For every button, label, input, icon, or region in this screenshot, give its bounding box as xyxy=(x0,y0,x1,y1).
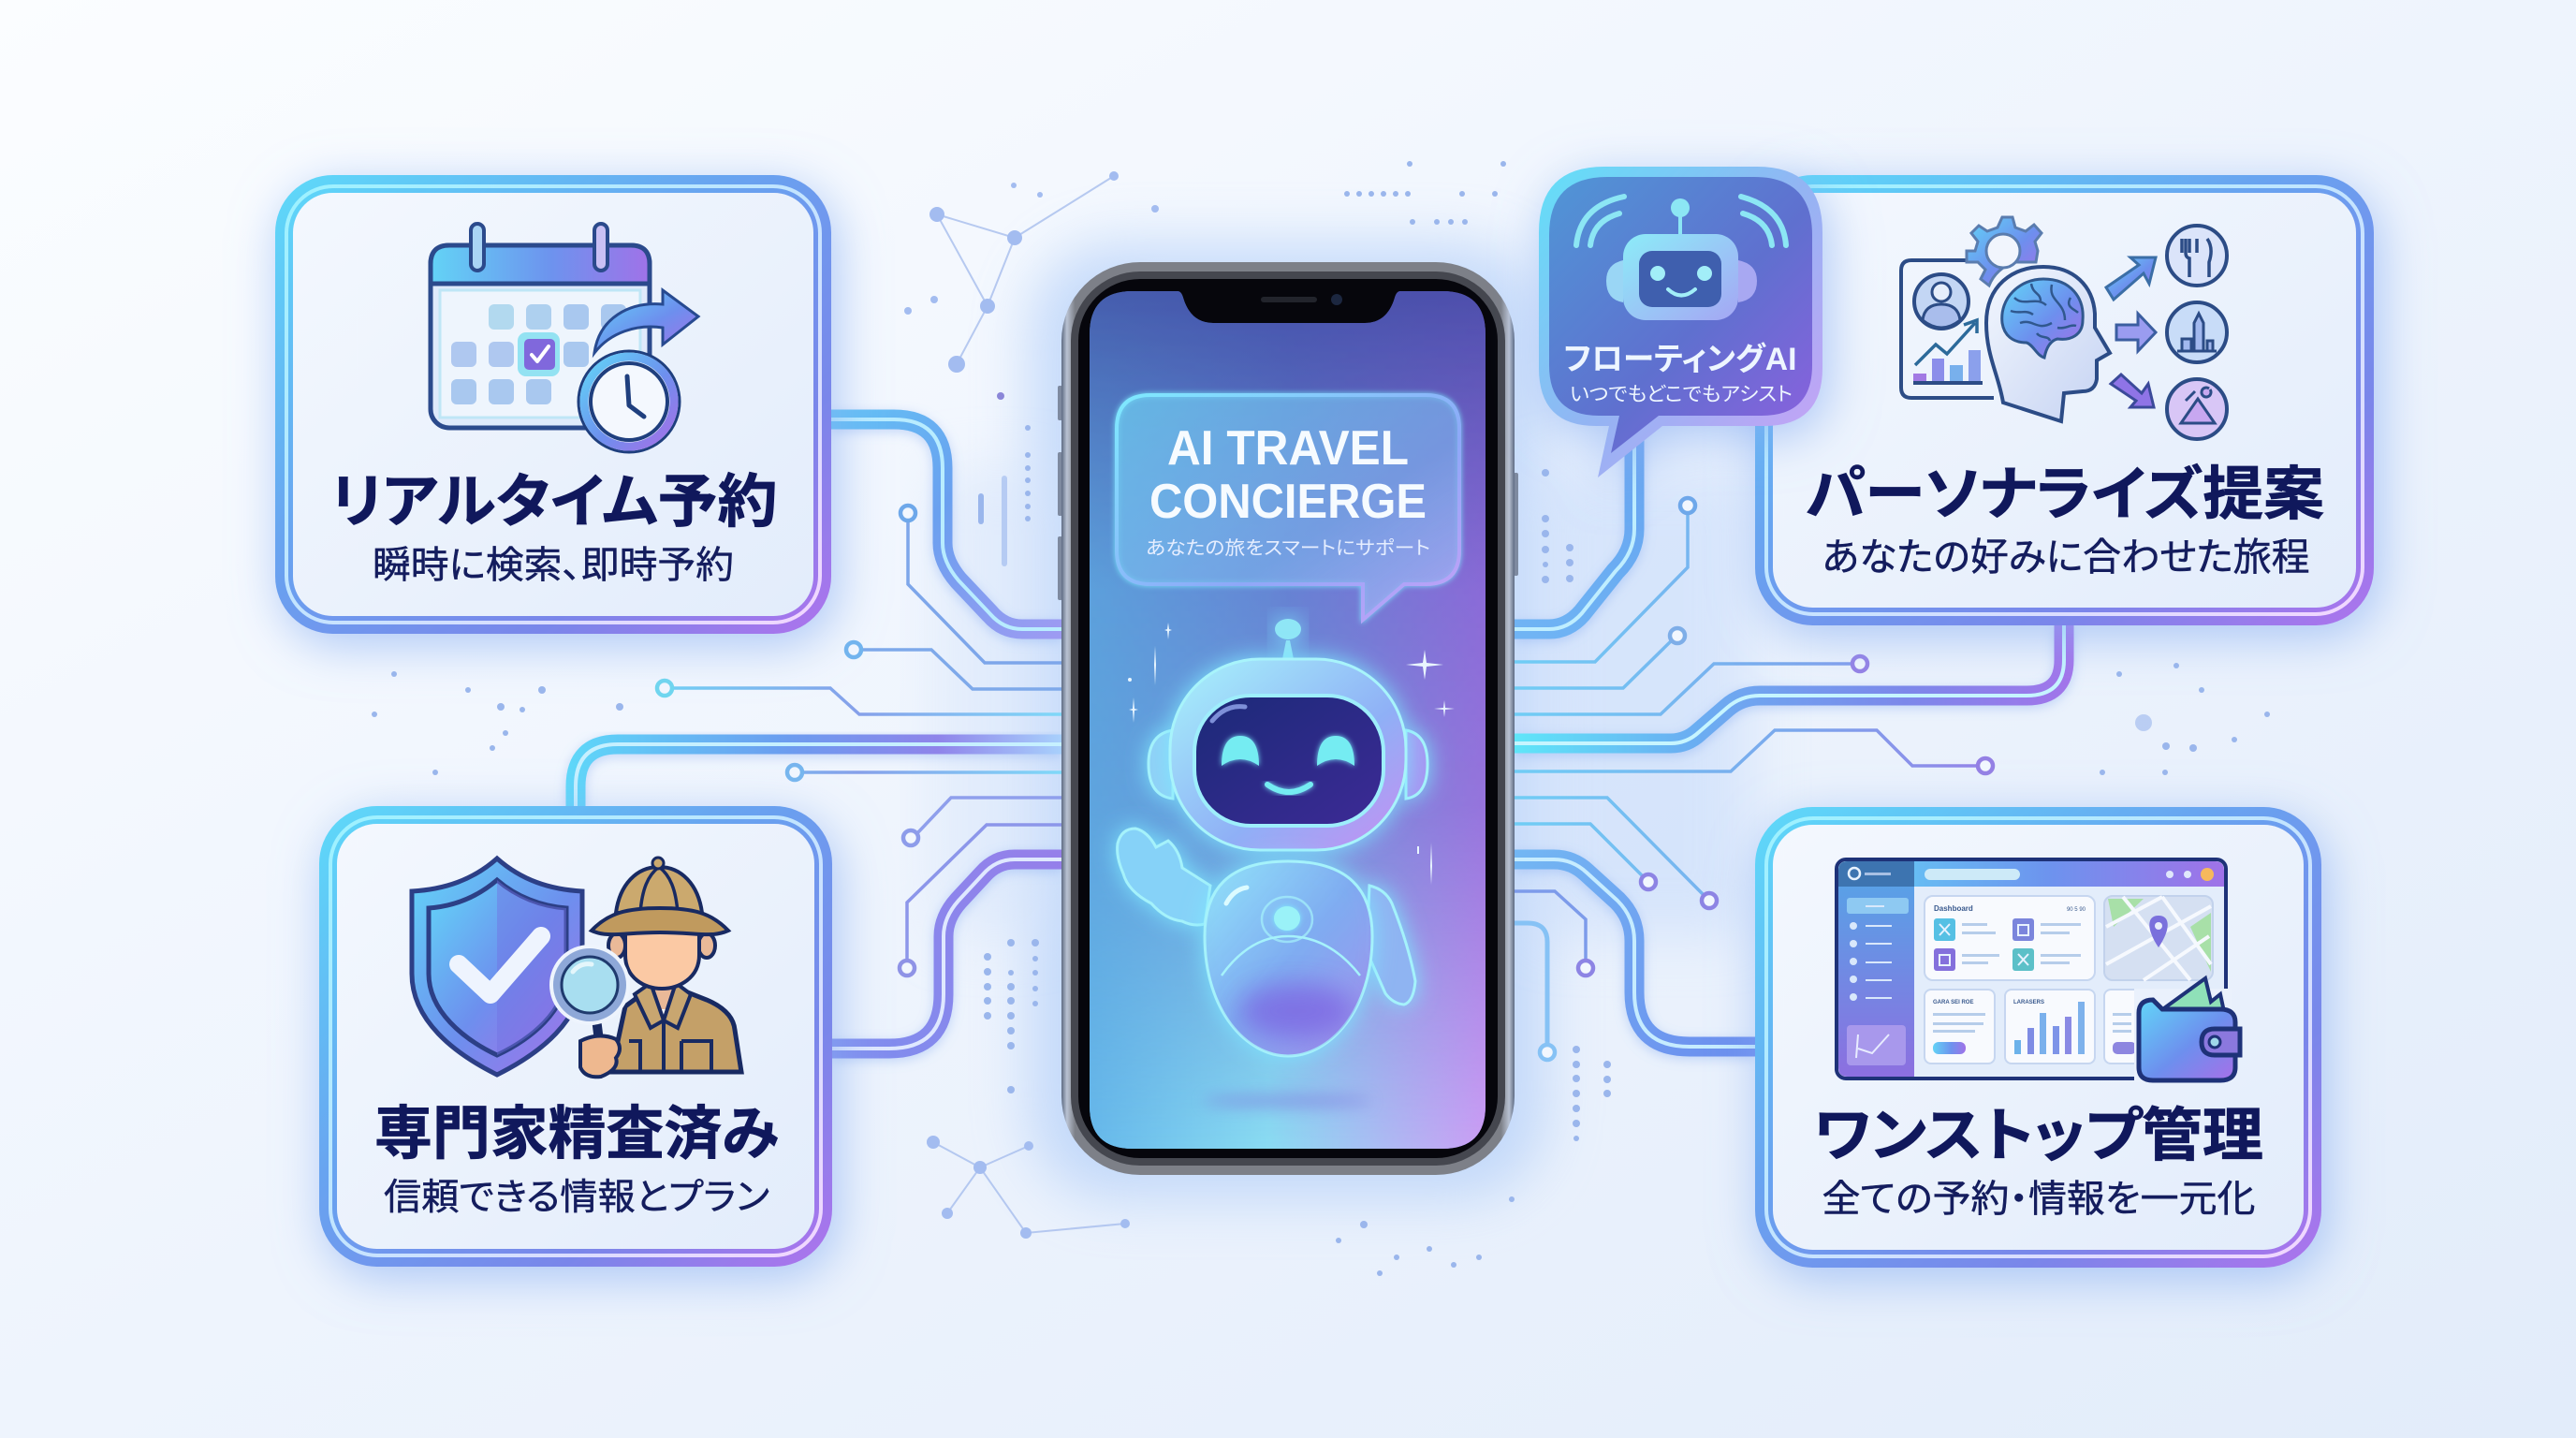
thick connector: expert verified xyxy=(576,744,1061,806)
icon: dashboard and wallet: LARASERS xyxy=(2013,1000,2044,1005)
bubble heading: フローティングAI xyxy=(1563,342,1797,377)
background constellations and dots xyxy=(372,161,2270,1276)
bubble subheading: いつでもどこでもアシスト xyxy=(1570,384,1793,405)
panel: real-time booking xyxy=(285,183,822,625)
thick connector: floating AI xyxy=(1515,431,1634,629)
robot body xyxy=(1205,861,1372,1056)
icon: dashboard and wallet xyxy=(1837,859,2240,1082)
phone xyxy=(1058,262,1518,1175)
panel: personalized suggestions xyxy=(1764,183,2364,616)
icon: brain analysis and recommendations xyxy=(1901,217,2227,439)
robot arms xyxy=(1118,829,1415,1005)
icon: dashboard and wallet: 90 5 90 xyxy=(2067,907,2086,913)
panel: expert verified xyxy=(328,814,824,1258)
icon: calendar with clock xyxy=(431,224,698,452)
robot antenna xyxy=(1275,619,1301,659)
phone screen xyxy=(1090,291,1486,1149)
heading: personalized suggestions: パーソナライズ提案 xyxy=(1806,462,2324,527)
headline speech bubble xyxy=(1117,395,1459,620)
thick connector: real-time booking xyxy=(831,419,1061,629)
phone side buttons xyxy=(1058,386,1518,600)
subheading: one-stop management: 全ての予約・情報を一元化 xyxy=(1822,1179,2256,1220)
floating AI bubble xyxy=(1539,167,1822,477)
robot face xyxy=(1194,696,1383,826)
headline subtitle: あなたの旅をスマートにサポート xyxy=(1146,537,1430,559)
icon: dashboard and wallet: GARA SEI ROE xyxy=(1933,1000,1973,1005)
heading: one-stop management: ワンストップ管理 xyxy=(1814,1104,2263,1168)
circuit traces: left xyxy=(576,419,1061,1049)
robot head xyxy=(1170,659,1406,850)
icon: shield and inspector xyxy=(412,858,741,1077)
headline title: CONCIERGE xyxy=(1149,475,1427,529)
icon: dashboard and wallet: Dashboard xyxy=(1934,904,1973,913)
subheading: expert verified: 信頼できる情報とプラン xyxy=(384,1178,769,1218)
sparkles xyxy=(1128,623,1455,885)
heading: expert verified: 専門家精査済み xyxy=(374,1102,779,1167)
panel: one-stop management xyxy=(1764,816,2312,1258)
circuit traces: right xyxy=(1515,431,2064,1060)
subheading: real-time booking: 瞬時に検索、即時予約 xyxy=(373,545,734,586)
thick connector: expert verified lower xyxy=(832,859,1061,1049)
robot mascot xyxy=(1118,619,1455,1108)
headline title: AI TRAVEL xyxy=(1167,421,1409,476)
subheading: personalized suggestions: あなたの好みに合わせた旅程 xyxy=(1822,536,2310,579)
heading: real-time booking: リアルタイム予約 xyxy=(331,470,777,535)
thick connector: personalized suggestions xyxy=(1515,625,2064,743)
icon: bubble robot xyxy=(1576,197,1786,320)
robot ears xyxy=(1149,730,1427,799)
thick connector: one-stop management xyxy=(1515,859,1755,1047)
headline title xyxy=(1149,421,1427,529)
